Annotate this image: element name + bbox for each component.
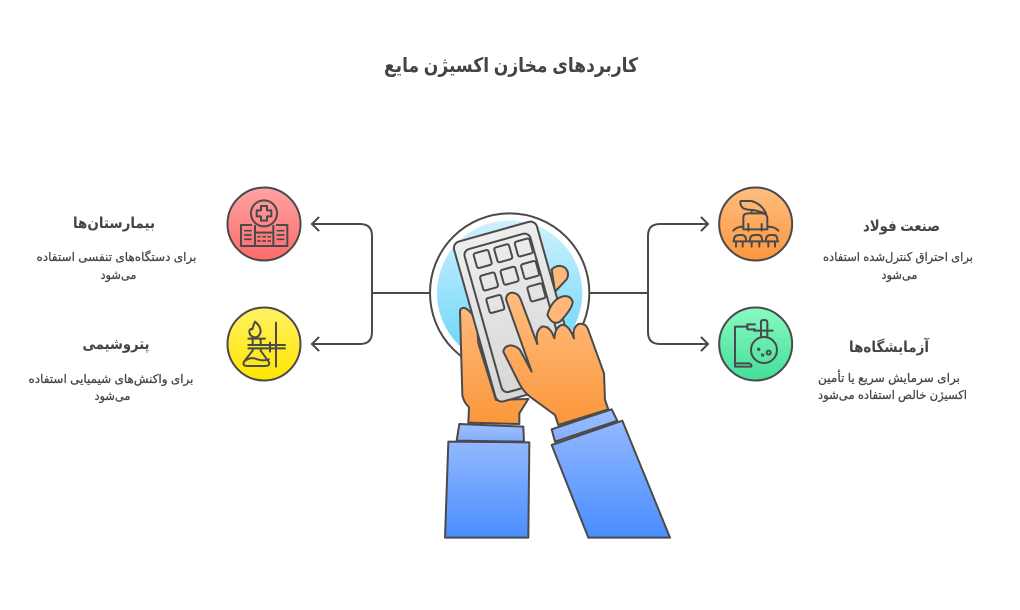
text: laboratories: [818, 338, 967, 403]
text: steel industry: [823, 218, 973, 283]
back finger: [552, 266, 568, 292]
text: laboratories: اکسیژن خالص استفاده می‌شود: [818, 388, 967, 403]
right cuff: [552, 409, 617, 442]
left sleeve: [445, 442, 529, 538]
text: steel industry: می‌شود: [882, 268, 918, 283]
text: petrochemical: برای واکنش‌های شیمیایی استفاده: [28, 372, 194, 387]
text: laboratories: برای سرمایش سریع یا تأمین: [818, 369, 960, 386]
text: hospitals: بیمارستان‌ها: [73, 215, 155, 232]
text: steel industry: برای احتراق کنترل‌شده استفاده: [823, 250, 973, 265]
central illustration: hands on calculator: [430, 213, 670, 538]
icon: steel furnace: [719, 187, 792, 260]
text: petrochemical: پتروشیمی: [82, 336, 150, 354]
title: کاربردهای مخازن اکسیژن مایع: [384, 55, 638, 77]
icon: petrochemical flask and flame: [227, 307, 300, 380]
right sleeve: [552, 421, 670, 538]
left cuff: [457, 424, 524, 442]
icon: hospital: [227, 187, 300, 260]
text: hospitals: [36, 215, 196, 283]
text: petrochemical: [28, 336, 194, 404]
icon: laboratory flask: [719, 307, 792, 380]
right hand: [503, 293, 608, 425]
text: laboratories: آزمایشگاه‌ها: [849, 338, 930, 356]
text: petrochemical: می‌شود: [94, 389, 130, 404]
front finger: [547, 296, 573, 323]
blue circle backdrop: [430, 213, 589, 373]
left hand: [460, 308, 528, 424]
calculator: [452, 220, 580, 403]
text: hospitals: برای دستگاه‌های تنفسی استفاده: [36, 250, 196, 265]
connector arrows: left: [312, 218, 430, 350]
text: hospitals: می‌شود: [100, 268, 136, 283]
connector arrows: right: [589, 218, 708, 350]
text: steel industry: صنعت فولاد: [863, 218, 940, 235]
